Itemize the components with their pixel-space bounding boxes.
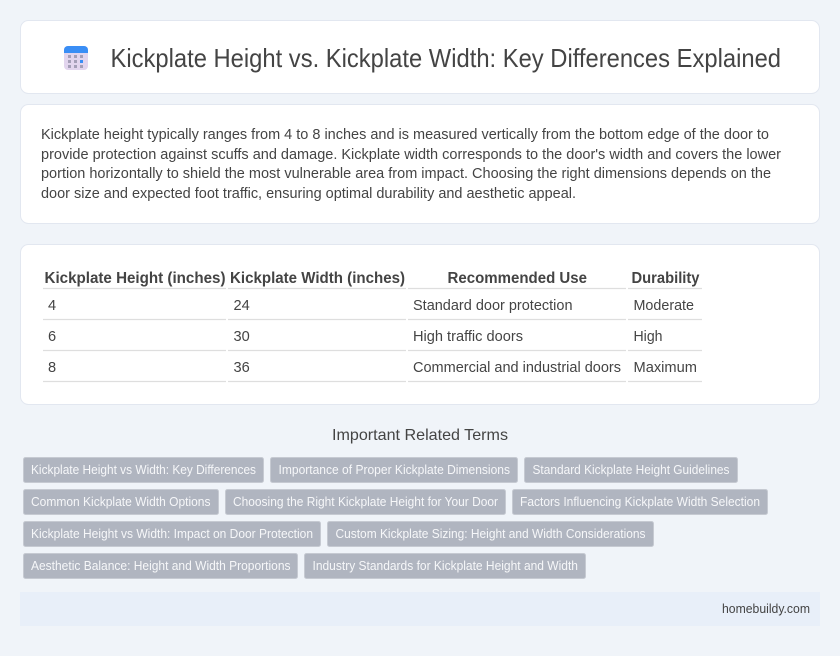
tags: related terms: Aesthetic Balance: Height and Width Proportions	[31, 559, 290, 573]
table row 2	[48, 329, 662, 345]
tags: related terms: Factors Influencing Kickplate Width Selection	[520, 495, 760, 509]
table row 1: Standard door protection	[413, 298, 572, 314]
text block: description: portion horizontally to shield the most vulnerable area from impact. Choosing the right dimensions depends on the	[41, 166, 771, 182]
footer	[20, 592, 820, 626]
table header: Recommended Use	[448, 270, 587, 287]
text block: description: door size and expected foot traffic, ensuring optimal durability and aesthetic appeal.	[41, 186, 576, 202]
footer: homebuildy.com	[722, 602, 810, 616]
text block: description: Kickplate height typically ranges from 4 to 8 inches and is measured vertically from the bottom edge of the door to	[41, 127, 769, 143]
table row 1: Moderate	[634, 298, 694, 314]
panel: table	[20, 244, 820, 404]
tags: related terms: Industry Standards for Kickplate Height and Width	[312, 559, 578, 573]
tags: related terms: Common Kickplate Width Options	[31, 495, 210, 509]
heading: related terms: Important Related Terms	[332, 427, 508, 444]
table header	[44, 270, 700, 287]
table row 2: 30	[234, 329, 250, 345]
table header: Kickplate Width (inches)	[230, 270, 405, 287]
table row 2: High	[634, 329, 662, 345]
tags: related terms: Importance of Proper Kickplate Dimensions	[278, 463, 510, 477]
tags: related terms: Kickplate Height vs Width: Impact on Door Protection	[31, 527, 313, 541]
table row 3: 36	[234, 360, 250, 376]
table header: Durability	[632, 270, 700, 287]
table row 1	[48, 298, 694, 314]
panel: description	[20, 104, 820, 224]
table row 3	[48, 360, 697, 376]
panel: header	[20, 20, 820, 94]
tags: related terms: Standard Kickplate Height Guidelines	[532, 463, 730, 477]
table row 2: High traffic doors	[413, 329, 523, 345]
text block: description: provide protection against scuffs and damage. Kickplate width corresponds to the door's width and covers the lower	[41, 147, 781, 163]
table row 3: Commercial and industrial doors	[413, 360, 621, 376]
table row 3: Maximum	[634, 360, 697, 376]
title: Kickplate Height vs. Kickplate Width: Key Differences Explained	[110, 45, 781, 73]
tags: related terms: Kickplate Height vs Width: Key Differences	[31, 463, 256, 477]
icon: calendar	[64, 46, 88, 70]
table row 1: 24	[234, 298, 250, 314]
tags: related terms	[24, 458, 768, 578]
table row 1: 4	[48, 298, 56, 314]
table header: Kickplate Height (inches)	[44, 270, 226, 287]
table row 2: 6	[48, 329, 56, 345]
table row 3: 8	[48, 360, 56, 376]
tags: related terms: Custom Kickplate Sizing: Height and Width Considerations	[336, 527, 646, 541]
tags: related terms: Choosing the Right Kickplate Height for Your Door	[233, 495, 498, 509]
text block: description	[41, 127, 781, 202]
